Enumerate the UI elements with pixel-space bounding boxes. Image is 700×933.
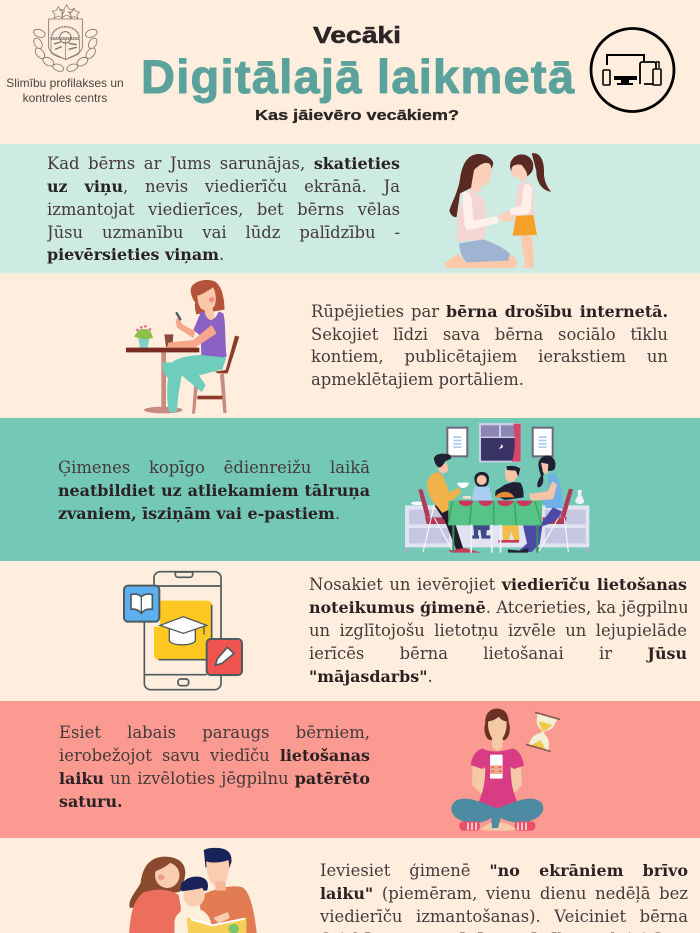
text: look at the child [47, 154, 400, 264]
text: device rules [309, 575, 687, 686]
text: child's internet safety: Rūpējieties par bērna drošību internetā. [311, 302, 668, 321]
text: be a good example: Esiet labais paraugs bērniem, [59, 723, 370, 742]
text: device rules: Nosakiet un ievērojiet viedierīču lietošanas [309, 575, 687, 594]
text: family meals: zvaniem, īsziņām vai e-pastiem. [58, 504, 340, 523]
text: device rules: noteikumus ģimenē. Atcerieties, ka jēgpilnu [309, 598, 687, 617]
illustration: tablet with education apps [123, 570, 243, 690]
text: look at the child: izmantojat viedierīces, bet bērns vēlas [47, 200, 400, 219]
text: look at the child: Kad bērns ar Jums sarunājas, skatieties [47, 154, 400, 173]
heading: Vecāki: Vecāki [313, 22, 401, 48]
panel: teal band [0, 418, 700, 561]
panel: mint band [0, 144, 700, 273]
subheading: Kas jāievēro vecākiem? [255, 107, 459, 124]
text: family meals: neatbildiet uz atliekamiem tālruņa [58, 481, 370, 500]
text: look at the child: uz viņu, nevis viedierīču ekrānā. Ja [47, 177, 400, 196]
text: device rules: "mājasdarbs". [309, 667, 433, 686]
panel: coral band [0, 701, 700, 838]
illustration: mother and daughter [444, 153, 551, 268]
text: be a good example: saturu. [59, 792, 123, 811]
text: screen-free time: Ieviesiet ģimenē "no ekrāniem brīvo [320, 861, 688, 880]
logo caption [6, 76, 124, 104]
illustration: parents reading with child [129, 848, 257, 933]
text: be a good example: ierobežojot savu viedīču lietošanas [59, 746, 370, 765]
text: screen-free time [320, 861, 688, 933]
illustration: family at dinner table [405, 423, 590, 553]
text: child's internet safety: kontiem, publicētajiem ierakstiem un [311, 347, 668, 366]
text: look at the child: Jūsu uzmanību vai lūdz palīdzību - [47, 223, 400, 242]
text: family meals: Ģimenes kopīgo ēdienreižu laikā [58, 458, 370, 477]
logo caption: kontroles centrs [23, 90, 107, 104]
illustration: woman at cafe table with phone [126, 280, 240, 414]
text: child's internet safety [311, 302, 668, 389]
text: family meals [58, 458, 370, 523]
icon: devices in a circle [590, 27, 676, 113]
illustration: woman with phone and hourglass [451, 708, 560, 831]
text: device rules: ierīcēs bērna lietošanai ir Jūsu [309, 644, 687, 663]
heading: Digitālajā laikmetā: Digitālajā laikmetā [141, 50, 575, 103]
text: look at the child: pievērsieties viņam. [47, 245, 224, 264]
text: be a good example: laiku un izvēloties jēgpilnu patērēto [59, 769, 370, 788]
text: child's internet safety: apmeklētajiem portāliem. [311, 370, 524, 389]
text: child's internet safety: Sekojiet līdzi sava bērna sociālo tīklu [311, 325, 668, 344]
logo: coat of arms [33, 4, 98, 72]
text: device rules: un izglītojošu lietotņu izvēle un lejupielāde [309, 621, 687, 640]
text: screen-free time: laiku" (piemēram, vienu dienu nedēļā bez [320, 884, 688, 903]
logo caption: Slimību profilakses un [6, 76, 124, 90]
title block [141, 22, 575, 124]
text: be a good example [59, 723, 370, 811]
text: screen-free time: viedierīču izmantošanas). Veiciniet bērna [320, 907, 688, 926]
